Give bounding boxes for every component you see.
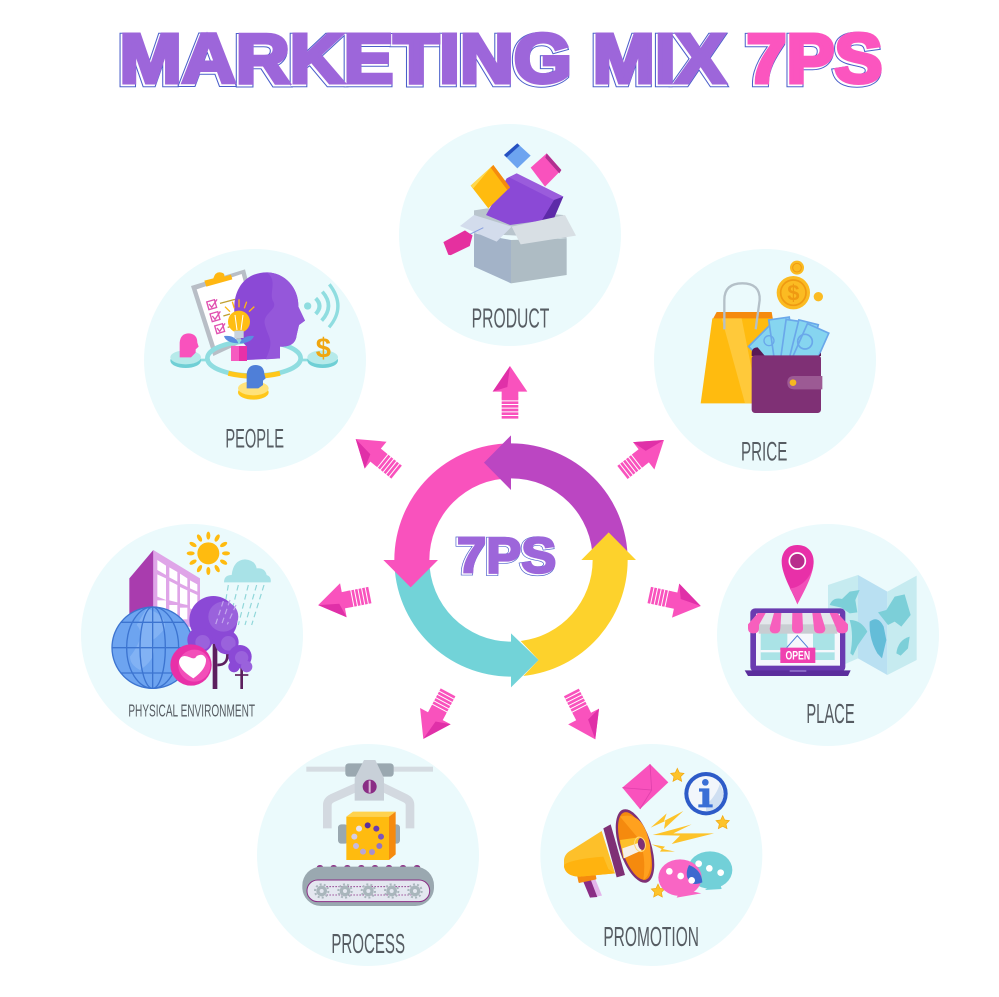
panel: promotion — [540, 744, 762, 966]
title: MARKETING MIX — [120, 20, 726, 98]
circle background — [257, 744, 479, 966]
arrow: to people — [345, 426, 406, 485]
title: 7PS — [746, 20, 882, 98]
arrow: to product — [493, 366, 527, 417]
label: PHYSICAL ENVIRONMENT — [128, 701, 255, 721]
center label: 7PS — [456, 529, 555, 585]
panel: price — [654, 249, 876, 471]
arrow: yellow cycle segment — [521, 532, 636, 676]
central cycle diagram — [383, 435, 636, 687]
icon: megaphone, envelope, info and chat — [564, 764, 732, 898]
circle background — [144, 249, 366, 471]
arrow: to process — [408, 685, 463, 747]
icon: head with idea and network: $ — [316, 332, 331, 363]
label: PROCESS — [331, 928, 405, 959]
center label: 7PS — [457, 527, 556, 583]
panel: place — [717, 524, 939, 746]
circle background — [654, 249, 876, 471]
label: PRICE — [741, 437, 787, 467]
title: 7PS — [745, 21, 881, 99]
icon: open box with product shapes — [444, 143, 576, 283]
panel: physical environment — [81, 524, 303, 746]
label: PROMOTION — [603, 921, 699, 952]
icon: robotic arm and conveyor — [302, 760, 434, 906]
icon: bag, wallet and coins — [701, 261, 829, 413]
panel: process — [257, 744, 479, 966]
title: 7PS — [745, 21, 881, 99]
icon: head with idea and network — [170, 269, 338, 400]
title: MARKETING MIX — [118, 21, 724, 99]
circle background — [399, 124, 621, 346]
icon: online shop, pin and map — [745, 545, 917, 676]
arrow: pink cycle segment — [383, 443, 511, 587]
title: MARKETING MIX — [118, 21, 724, 99]
arrow: purple cycle segment — [484, 435, 628, 560]
label: PEOPLE — [225, 423, 284, 453]
circle background — [717, 524, 939, 746]
panel: people — [144, 249, 366, 471]
label: PLACE — [806, 698, 855, 729]
circle background — [540, 744, 762, 966]
icon: building, globe, trees and weather — [112, 532, 271, 689]
icon: online shop, pin and map: OPEN — [785, 649, 810, 663]
icon: bag, wallet and coins: $ — [787, 281, 799, 306]
arrow: teal cycle segment — [394, 560, 539, 687]
panel: product — [399, 124, 621, 346]
arrow: to physical environment — [315, 578, 372, 622]
label: PRODUCT — [472, 302, 549, 333]
arrow: to promotion — [557, 686, 611, 747]
center label: 7PS — [456, 529, 555, 585]
circle background — [81, 524, 303, 746]
arrow: to place — [647, 578, 704, 623]
radiating arrows — [315, 366, 704, 747]
arrow: to price — [613, 426, 675, 485]
